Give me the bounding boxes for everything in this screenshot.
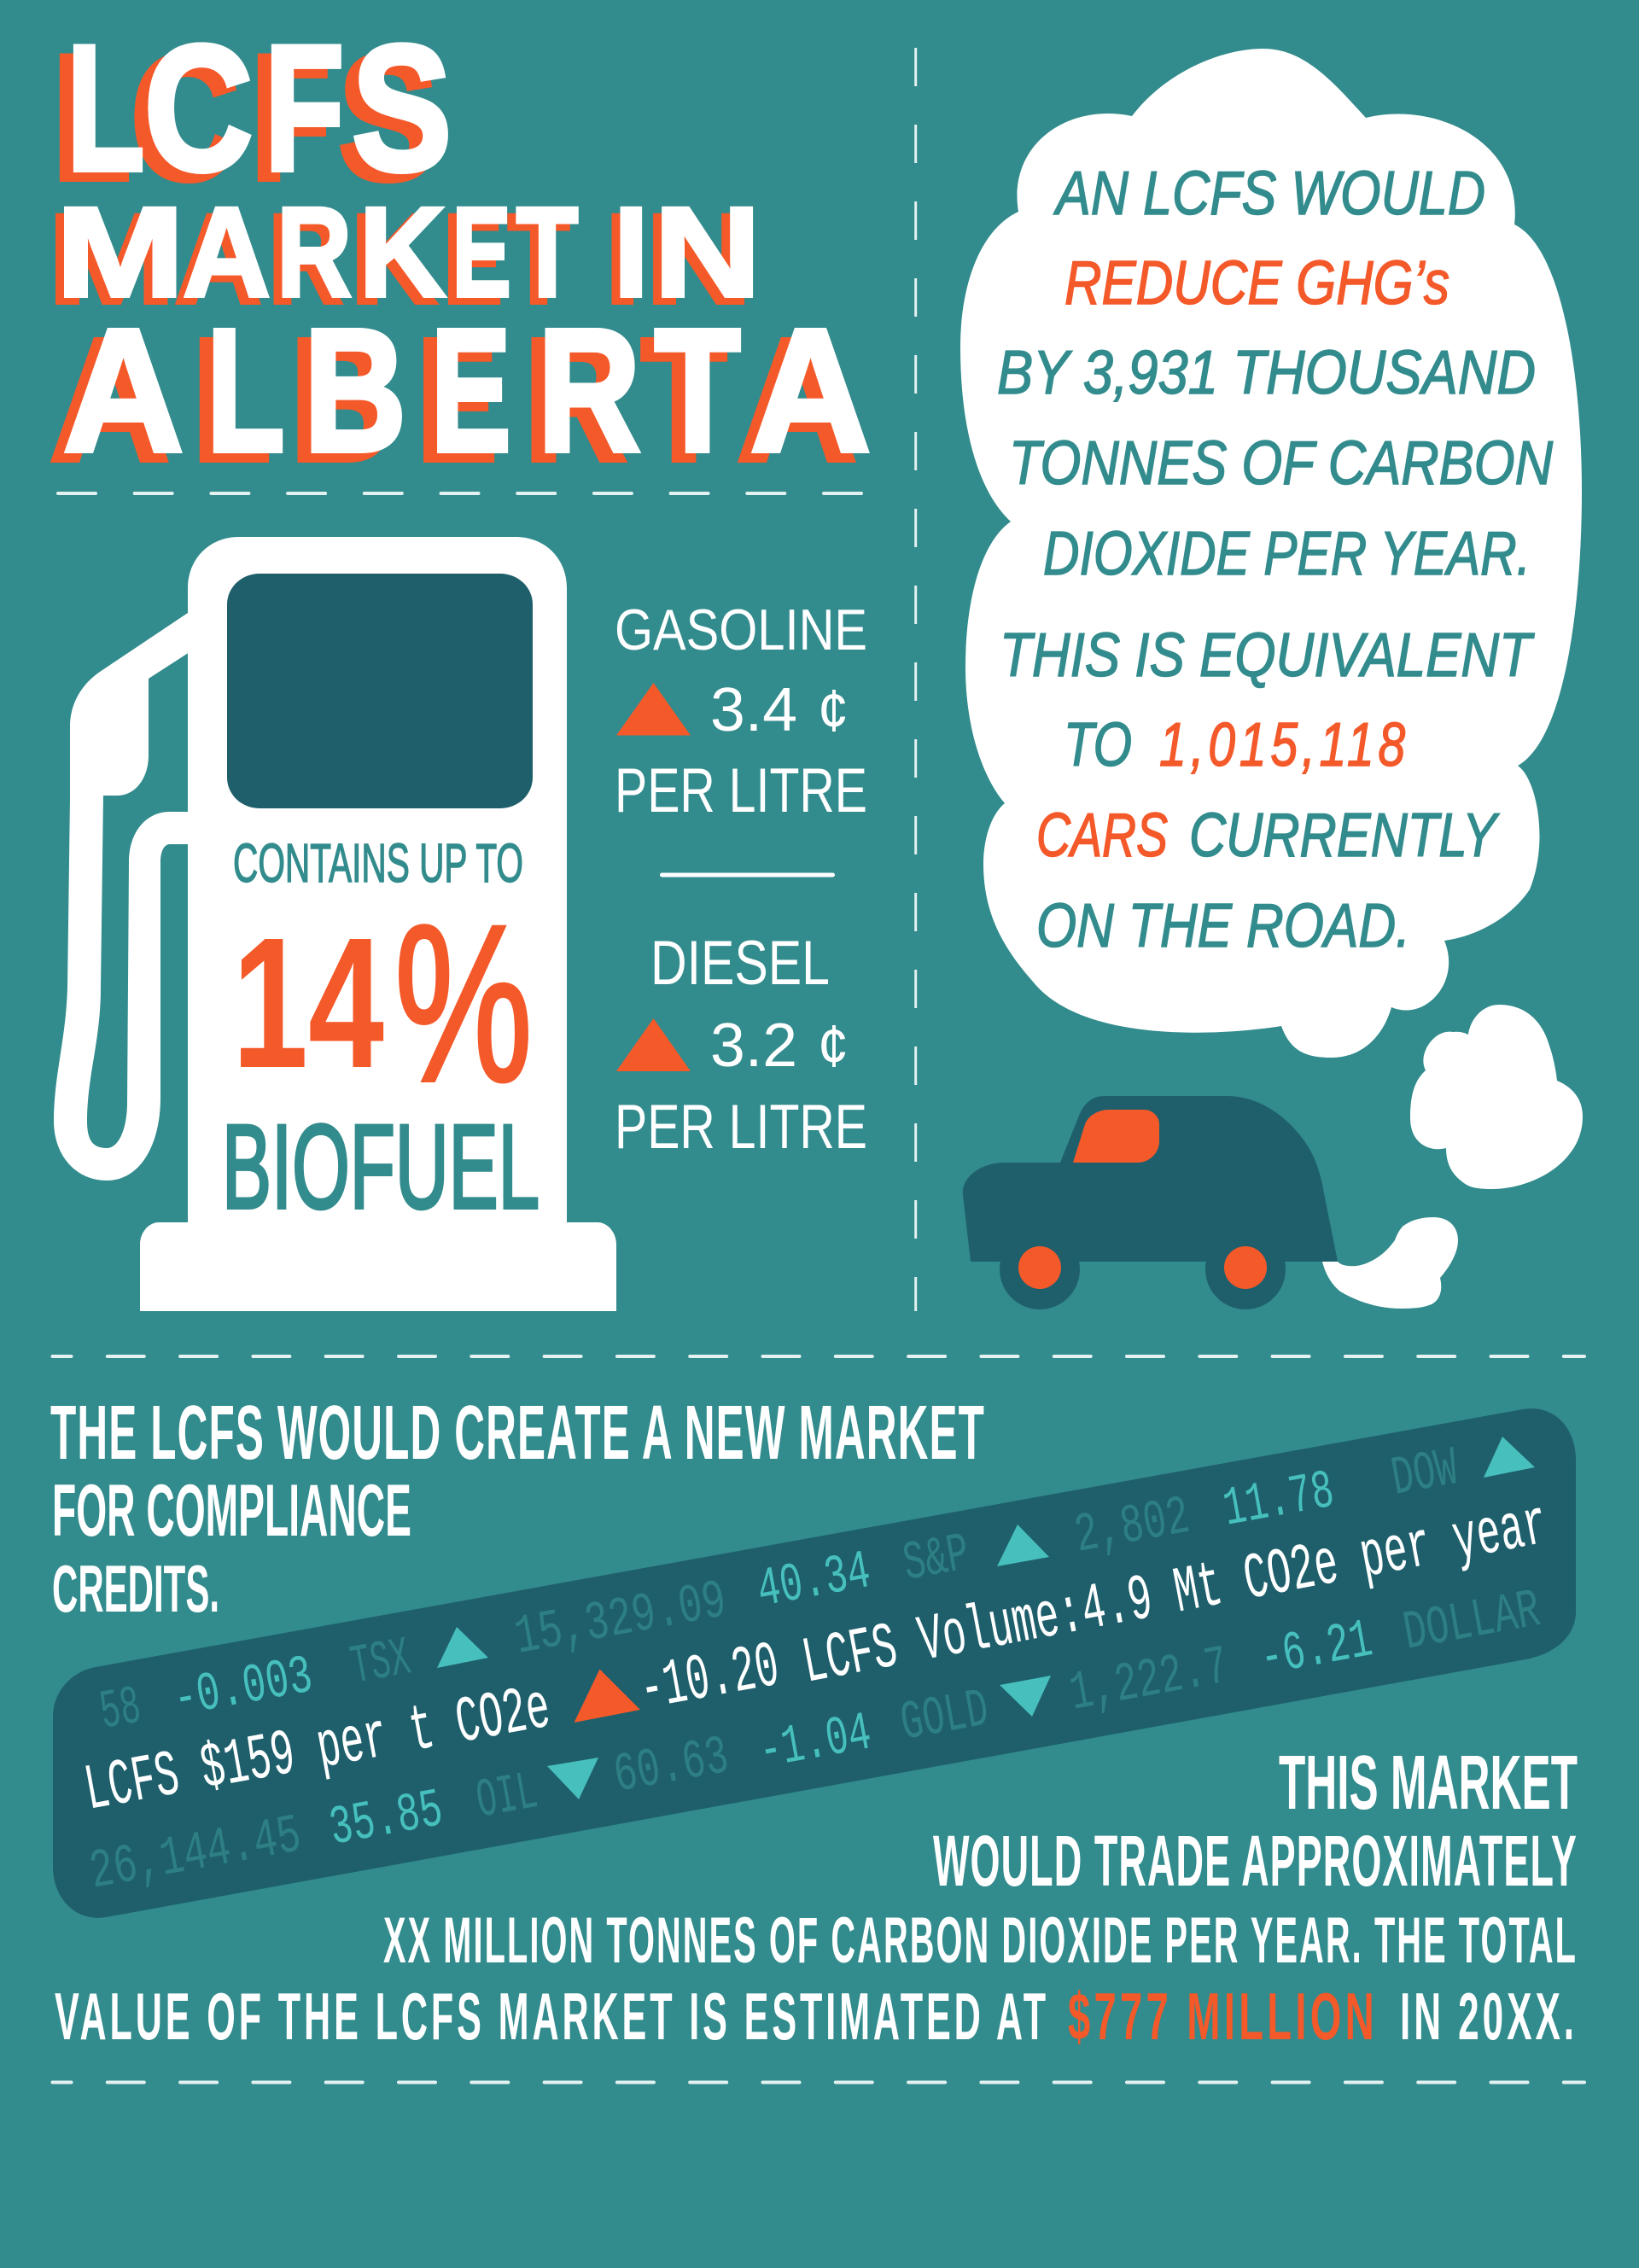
ticker bottom row: -1.04 (755, 1703, 876, 1784)
14 percent figure (232, 878, 533, 1128)
market heading (50, 1391, 985, 1626)
ticker top row: 2,802 (1070, 1487, 1194, 1568)
title shadow: T (641, 302, 727, 498)
ticker bottom row: 1,222.7 (1065, 1637, 1234, 1726)
diesel price (615, 929, 867, 1162)
title lettering: S (352, 8, 452, 208)
bubble text: ON THE ROAD. (1036, 892, 1410, 960)
title lettering: R (538, 293, 640, 488)
title shadow: L (193, 302, 271, 498)
gasoline price: PER LITRE (615, 756, 867, 825)
14 percent figure: 14 (232, 900, 384, 1107)
title lettering: K (359, 180, 446, 324)
title lettering: A (63, 293, 184, 488)
title shadow: R (268, 187, 343, 330)
market heading: CREDITS. (52, 1551, 219, 1626)
ticker main row (79, 1489, 1554, 1828)
title lettering: E (431, 293, 511, 488)
down-price arrow orange (574, 1670, 640, 1723)
ticker main row: -10.20 (634, 1630, 785, 1728)
rear wheel (1000, 1229, 1080, 1309)
diesel price: PER LITRE (615, 1093, 867, 1162)
title shadow: S (338, 17, 438, 218)
ticker top row: S&P (899, 1524, 974, 1596)
ticker top row: DOW (1387, 1438, 1463, 1511)
ticker bottom row: 35.85 (325, 1780, 447, 1861)
title shadow: F (251, 17, 330, 218)
stock ticker panel (53, 1408, 1576, 1918)
title lettering (55, 8, 871, 488)
gasoline price: GASOLINE (615, 598, 867, 662)
title lettering: F (265, 8, 344, 208)
title shadow: T (508, 187, 570, 330)
pump hose (54, 613, 190, 1181)
bubble text: BY 3,931 THOUSAND (997, 339, 1536, 407)
contains up to text: CONTAINS UP TO (233, 832, 523, 894)
title shadow: K (351, 187, 437, 330)
ticker top row: 58 (96, 1676, 146, 1745)
ticker bottom row: 60.63 (610, 1727, 733, 1808)
thought bubble with emissions text (960, 49, 1582, 1058)
bubble text: CURRENTLY (1189, 802, 1500, 870)
title lettering: R (277, 180, 352, 324)
ticker top row: 11.78 (1219, 1461, 1339, 1542)
ticker top row: TSX (347, 1629, 415, 1700)
ticker bottom row: DOLLAR (1399, 1580, 1545, 1665)
title shadow: A (737, 302, 857, 498)
bubble shape (960, 49, 1582, 1058)
title shadow: L (53, 17, 131, 218)
icon: exhaust puff cloud (1410, 1005, 1583, 1189)
title shadow: A (174, 187, 262, 330)
market value highlight: $777 MILLION (1068, 1979, 1378, 2054)
diesel price: 3.2 (710, 1012, 797, 1080)
title shadow: R (524, 302, 627, 498)
title lettering: M (55, 180, 184, 324)
bubble text: AN LCFS WOULD (1053, 160, 1485, 228)
bubble text: THIS IS EQUIVALENT (1000, 621, 1535, 690)
title shadow: A (50, 302, 170, 498)
title shadow (47, 17, 857, 498)
title lettering: L (67, 8, 145, 208)
gasoline price: 3.4 (710, 676, 797, 744)
ticker bottom row: OIL (472, 1762, 542, 1834)
diesel price: ¢ (818, 1012, 849, 1079)
title shadow: N (645, 187, 753, 330)
up arrow: gasoline (616, 683, 691, 736)
title shadow: M (47, 187, 176, 330)
title shadow: B (290, 302, 393, 498)
biofuel text: BIOFUEL (222, 1099, 540, 1233)
ticker top row: 40.34 (753, 1542, 875, 1623)
title shadow: I (604, 187, 640, 330)
title lettering: E (452, 180, 511, 324)
bubble text: TO (1064, 711, 1132, 779)
up arrow: diesel (616, 1018, 691, 1071)
icon: fuel pump (54, 537, 616, 1311)
ticker main row: LCFS $159 per t CO2e (79, 1672, 556, 1828)
title lettering: T (516, 180, 579, 324)
gasoline price (615, 598, 867, 825)
ticker background (53, 1408, 1576, 1918)
icon: car (963, 1096, 1338, 1309)
bubble text: CARS (1036, 802, 1168, 870)
gasoline price: ¢ (818, 677, 849, 743)
title lettering: A (183, 180, 271, 324)
ticker bottom row: -6.21 (1256, 1610, 1377, 1691)
ticker top row: 15,329.09 (510, 1571, 732, 1670)
bubble text: 1,015,118 (1159, 711, 1409, 779)
title shadow: E (417, 302, 498, 498)
title shadow: E (443, 187, 503, 330)
ticker top row (96, 1437, 1535, 1745)
title (47, 8, 871, 498)
ticker bottom row: GOLD (896, 1679, 994, 1756)
market heading: FOR COMPLIANCE (52, 1470, 411, 1552)
title lettering: C (144, 8, 253, 208)
title lettering: N (654, 180, 761, 324)
title lettering: A (750, 293, 871, 488)
car body (963, 1096, 1338, 1262)
14 percent figure: % (394, 878, 533, 1128)
icon: exhaust smoke (1322, 1217, 1458, 1309)
bubble text: TONNES OF CARBON (1009, 429, 1554, 498)
pump body (140, 537, 616, 1311)
market size text (55, 1740, 1578, 2054)
title lettering: L (207, 293, 285, 488)
diesel price: DIESEL (650, 929, 830, 998)
pump screen (227, 574, 533, 808)
car window (1073, 1110, 1159, 1163)
ticker bottom row: 26,144.45 (85, 1805, 306, 1904)
ticker top row: -0.003 (169, 1647, 318, 1732)
bubble text: DIOXIDE PER YEAR. (1043, 520, 1531, 588)
ticker bottom row (85, 1580, 1545, 1904)
title lettering: B (304, 293, 406, 488)
title lettering: T (655, 293, 741, 488)
title shadow: C (131, 17, 239, 218)
bubble text (997, 160, 1554, 960)
bubble text: REDUCE GHG’s (1064, 249, 1449, 318)
front wheel (1205, 1229, 1286, 1309)
title lettering: I (613, 180, 649, 324)
